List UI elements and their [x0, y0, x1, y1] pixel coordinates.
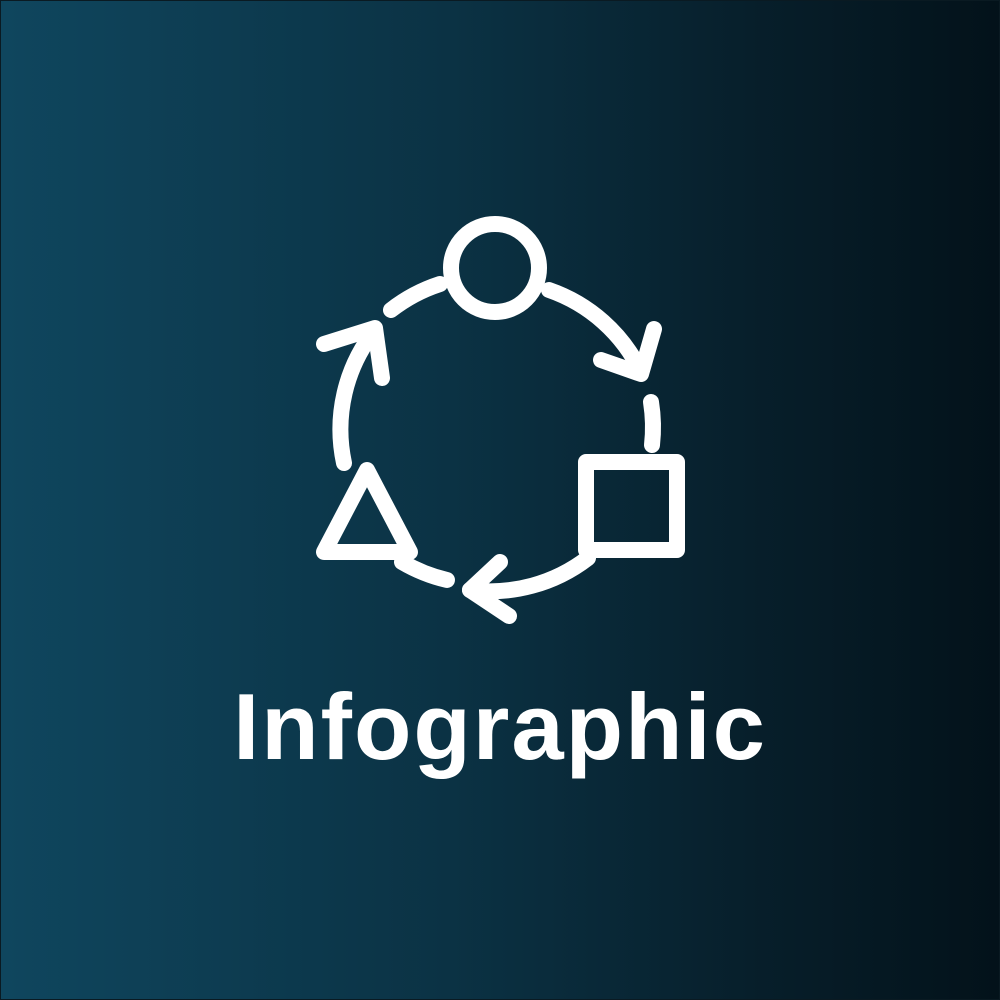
arrow: left arc: [324, 328, 382, 463]
icon: triangle: [324, 470, 410, 552]
arc: right segment: [651, 402, 653, 445]
arc: bottom left: [402, 562, 447, 580]
icon: circle: [451, 224, 539, 312]
title: Infographic: [233, 674, 767, 779]
arrow: bottom arc: [470, 558, 588, 616]
arrow: top right arc: [549, 290, 654, 374]
icon: square: [586, 462, 677, 550]
arc: top left: [391, 284, 440, 310]
